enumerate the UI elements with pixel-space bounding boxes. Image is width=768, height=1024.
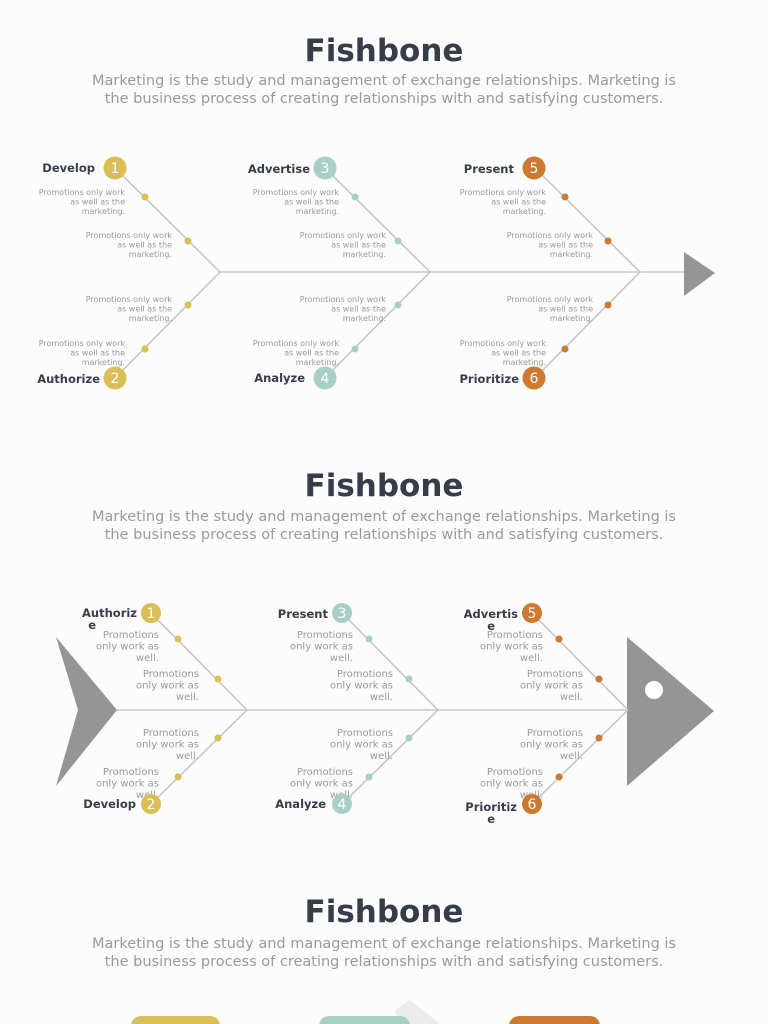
- group 1b: 2: [147, 797, 155, 813]
- group 2b: 3: [338, 606, 346, 622]
- group 3: Present: [464, 162, 514, 176]
- group 2b: Analyze: [275, 797, 326, 811]
- group 3b: 6: [528, 797, 537, 813]
- diagram 3 partial: [131, 1000, 600, 1024]
- group 1: Authorize: [37, 372, 100, 386]
- group 3: 6: [530, 371, 539, 387]
- group 2b: [275, 603, 438, 814]
- group 2: [248, 156, 430, 390]
- group 1: Develop: [42, 161, 95, 175]
- group 1: 2: [111, 371, 119, 387]
- group 3b: e: [487, 812, 495, 826]
- group 3: 5: [530, 161, 538, 177]
- group 1: 1: [111, 161, 119, 177]
- group 2: 3: [321, 161, 329, 177]
- section 3 header: Marketing is the study and management of exchange relationships. Marketing is: [92, 936, 676, 952]
- section 2 header: Marketing is the study and management of exchange relationships. Marketing is: [92, 509, 676, 525]
- group 1b: e: [88, 618, 96, 632]
- section 3 header: Fishbone: [305, 894, 463, 930]
- group 3b: Prioritiz: [465, 800, 517, 814]
- group 3b: e: [487, 619, 495, 633]
- section 2 header: [92, 468, 676, 543]
- section 3 header: the business process of creating relationships with and satisfying customers.: [105, 954, 663, 970]
- section 1 header: Fishbone: [305, 33, 463, 69]
- group 3: Prioritize: [460, 372, 519, 386]
- section 2 header: the business process of creating relationships with and satisfying customers.: [105, 527, 663, 543]
- group 2b: Present: [278, 607, 328, 621]
- section 1 header: the business process of creating relationships with and satisfying customers.: [105, 91, 663, 107]
- section 1 header: [92, 33, 676, 107]
- diagram 2: [56, 603, 714, 826]
- group 3b: [464, 603, 628, 826]
- group 3: [460, 156, 640, 390]
- group 1b: [82, 603, 247, 814]
- section 3 header: [92, 894, 676, 970]
- group 3b: Advertis: [464, 607, 518, 621]
- group 2: Advertise: [248, 162, 310, 176]
- section 2 header: Fishbone: [305, 468, 463, 504]
- group 2b: 4: [338, 797, 347, 813]
- group 1b: 1: [147, 606, 155, 622]
- arrow head 1: [684, 252, 715, 296]
- group 1: [37, 156, 220, 390]
- fish head: [627, 637, 714, 786]
- group 2: Analyze: [254, 371, 305, 385]
- group 1b: Develop: [83, 797, 136, 811]
- section 1 header: Marketing is the study and management of exchange relationships. Marketing is: [92, 73, 676, 89]
- group 2: 4: [321, 371, 330, 387]
- diagram 1: [37, 156, 715, 390]
- fish tail: [56, 637, 117, 786]
- group 3b: 5: [528, 606, 536, 622]
- group 1b: Authoriz: [82, 606, 137, 620]
